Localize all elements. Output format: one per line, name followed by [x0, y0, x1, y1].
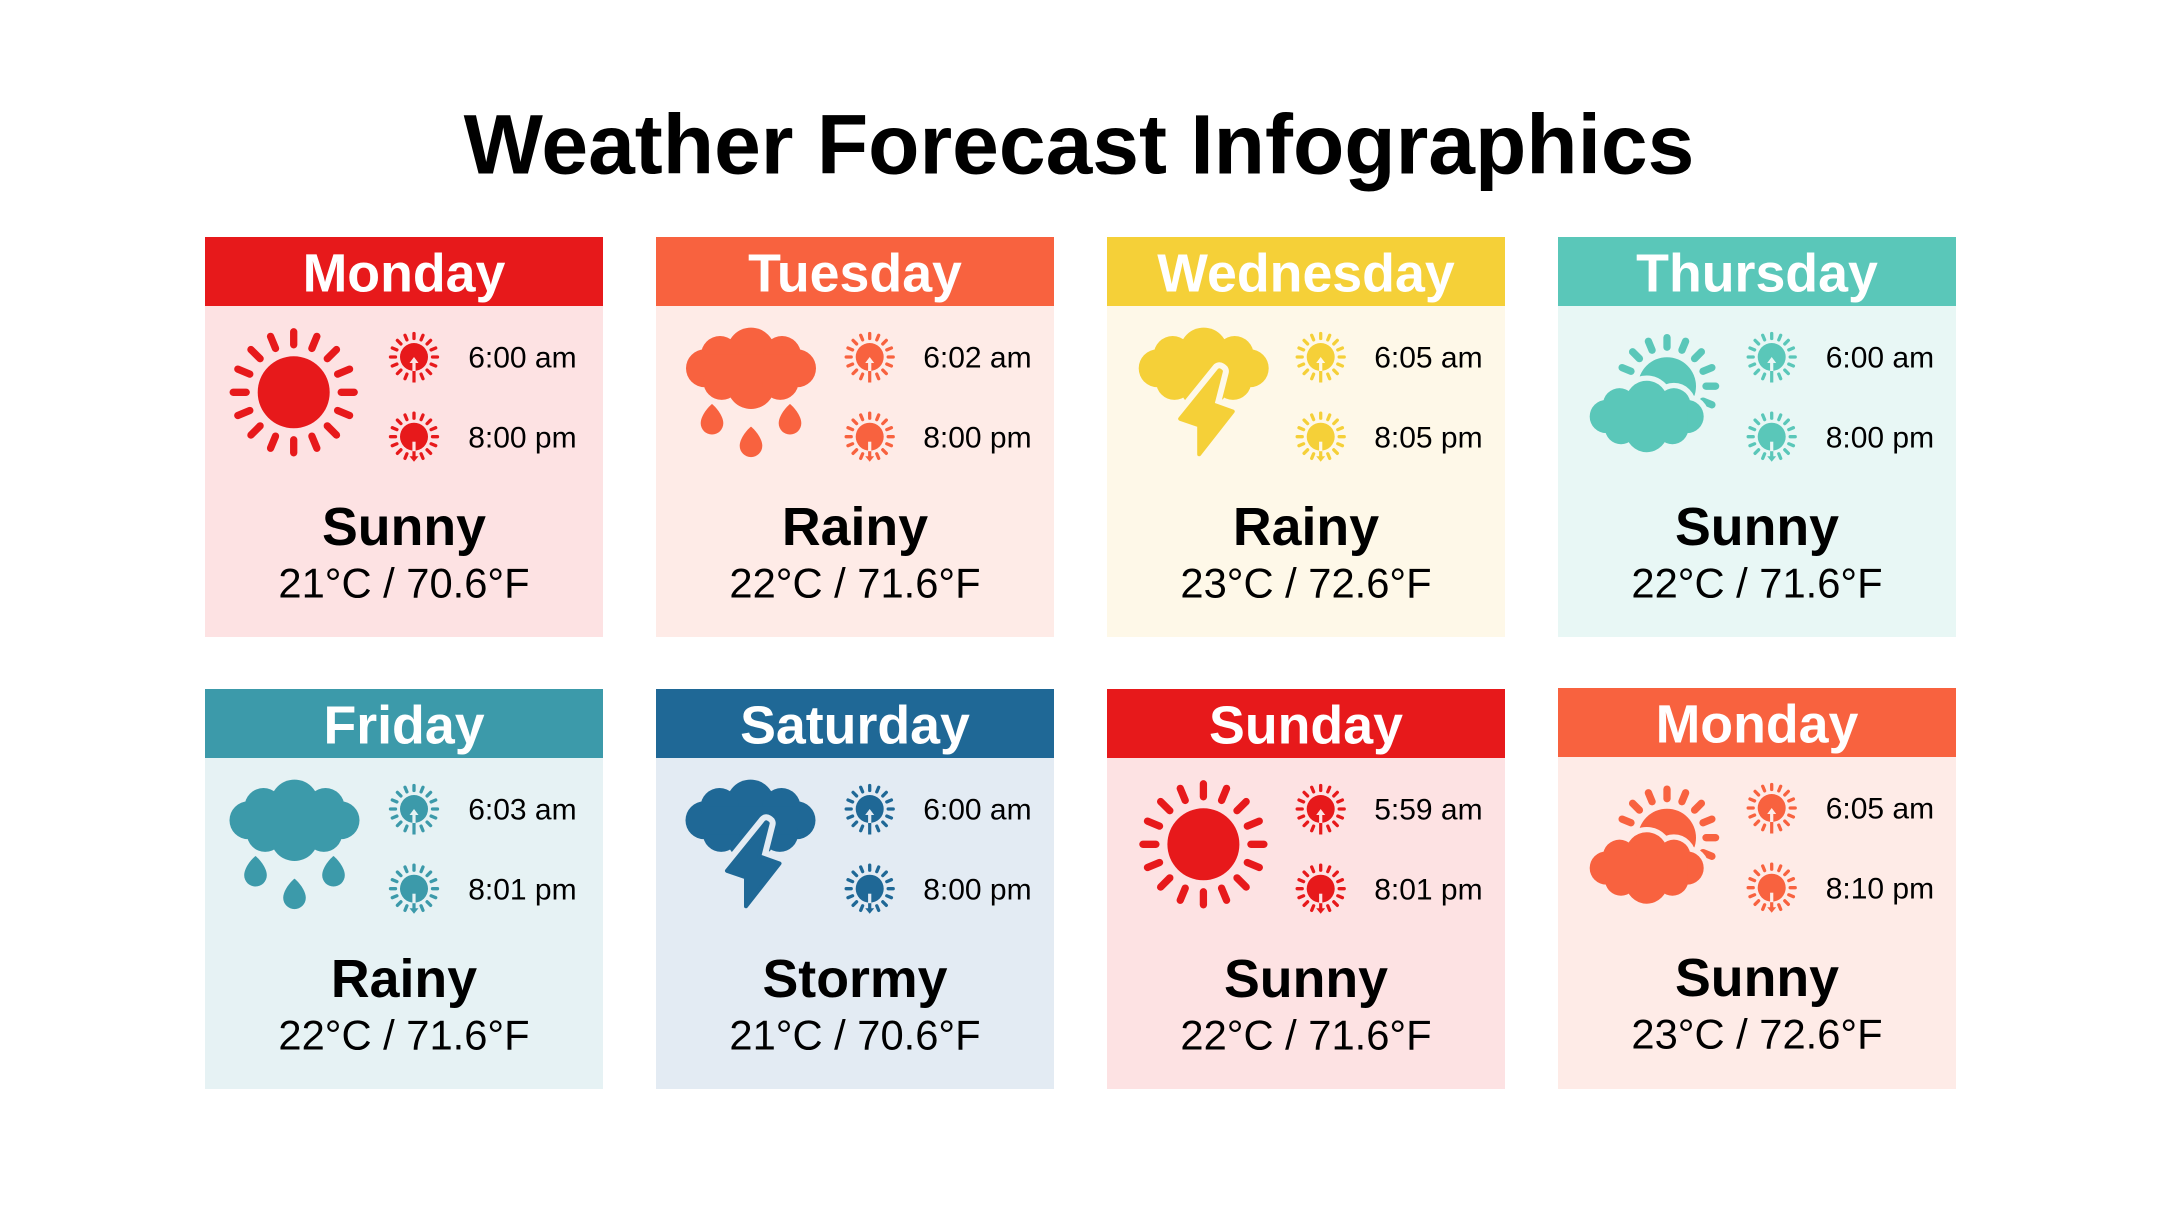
- temperature: 23°C / 72.6°F: [1180, 560, 1432, 607]
- icon: sun: [233, 332, 354, 453]
- header: Wednesday: Wednesday: [1157, 244, 1455, 304]
- icon: sunrise: [1748, 334, 1795, 382]
- condition: Rainy: [331, 949, 477, 1009]
- panel: Saturday stormy: [656, 689, 1054, 1089]
- sunrise time: 6:02 am: [923, 342, 1032, 375]
- sunrise time: 5:59 am: [1374, 794, 1483, 827]
- sunrise time: 6:00 am: [468, 342, 577, 375]
- header: Wednesday: [1107, 237, 1505, 306]
- temperature: 21°C / 70.6°F: [729, 1012, 981, 1059]
- header: Friday: Friday: [323, 696, 485, 756]
- condition: Sunny: [1675, 948, 1839, 1008]
- icon: rain cloud: [230, 780, 360, 909]
- icon: sunrise: [390, 334, 438, 382]
- header: Saturday: Saturday: [740, 696, 970, 756]
- condition: Stormy: [763, 949, 948, 1009]
- temperature: 22°C / 71.6°F: [1631, 560, 1883, 607]
- header: Saturday: [656, 689, 1054, 758]
- header: Monday: Monday: [303, 244, 506, 304]
- header: Tuesday: Tuesday: [748, 244, 962, 304]
- header: Monday: Monday: [1656, 695, 1859, 755]
- panel: Sunday sunny: [1107, 689, 1505, 1089]
- sunrise time: 6:00 am: [1826, 342, 1934, 375]
- temperature: 21°C / 70.6°F: [278, 560, 530, 607]
- condition: Rainy: [782, 497, 928, 557]
- sunrise time: 6:05 am: [1826, 793, 1934, 826]
- icon: sunset: [390, 865, 438, 914]
- icon: sunrise: [846, 786, 893, 834]
- icon: sunset: [846, 865, 893, 914]
- sunset time: 8:00 pm: [923, 421, 1032, 454]
- condition: Rainy: [1233, 497, 1379, 557]
- panel: Monday sunny: [205, 237, 603, 637]
- icon: sunrise: [846, 334, 893, 382]
- icon: sunset: [390, 413, 438, 462]
- icon: storm cloud: [686, 780, 816, 906]
- icon: storm cloud: [1139, 328, 1269, 454]
- header: Sunday: [1107, 689, 1505, 758]
- header: Thursday: [1558, 237, 1956, 306]
- temperature: 23°C / 72.6°F: [1631, 1011, 1883, 1058]
- icon: sun: [1143, 784, 1264, 905]
- icon: sunset: [1748, 413, 1795, 462]
- title: Weather Forecast Infographics: [464, 97, 1694, 191]
- sunset time: 8:01 pm: [1374, 873, 1483, 906]
- icon: sunrise: [1748, 784, 1795, 834]
- icon: sun behind cloud: [1590, 338, 1716, 452]
- header: Sunday: Sunday: [1209, 696, 1403, 756]
- icon: sunset: [1297, 413, 1344, 462]
- sunset time: 8:00 pm: [468, 421, 577, 454]
- temperature: 22°C / 71.6°F: [278, 1012, 530, 1059]
- condition: Sunny: [322, 497, 486, 557]
- sunrise time: 6:00 am: [923, 794, 1032, 827]
- panel: Friday rainy: [205, 689, 603, 1089]
- panel: Tuesday rainy: [656, 237, 1054, 637]
- header: Monday: [1558, 688, 1956, 757]
- header: Friday: [205, 689, 603, 758]
- panel: Thursday sunny: [1558, 237, 1956, 637]
- condition: Sunny: [1675, 497, 1839, 557]
- header: Monday: [205, 237, 603, 306]
- icon: sunset: [1297, 865, 1344, 914]
- icon: sunset: [846, 413, 893, 462]
- sunset time: 8:05 pm: [1374, 421, 1483, 454]
- panel: Monday sunny, second week: [1558, 688, 1956, 1089]
- icon: sunrise: [1297, 786, 1344, 834]
- sunset time: 8:00 pm: [1826, 421, 1934, 454]
- temperature: 22°C / 71.6°F: [1180, 1012, 1432, 1059]
- icon: sunset: [1748, 864, 1795, 913]
- condition: Sunny: [1224, 949, 1388, 1009]
- icon: rain cloud: [686, 328, 816, 457]
- sunset time: 8:01 pm: [468, 873, 577, 906]
- sunset time: 8:00 pm: [923, 873, 1032, 906]
- header: Thursday: Thursday: [1636, 244, 1878, 304]
- temperature: 22°C / 71.6°F: [729, 560, 981, 607]
- sunset time: 8:10 pm: [1826, 872, 1934, 905]
- sunrise time: 6:05 am: [1374, 342, 1483, 375]
- panel: Wednesday rainy: [1107, 237, 1505, 637]
- icon: sunrise: [1297, 334, 1344, 382]
- sunrise time: 6:03 am: [468, 794, 577, 827]
- header: Tuesday: [656, 237, 1054, 306]
- icon: sun behind cloud: [1590, 789, 1716, 904]
- icon: sunrise: [390, 786, 438, 834]
